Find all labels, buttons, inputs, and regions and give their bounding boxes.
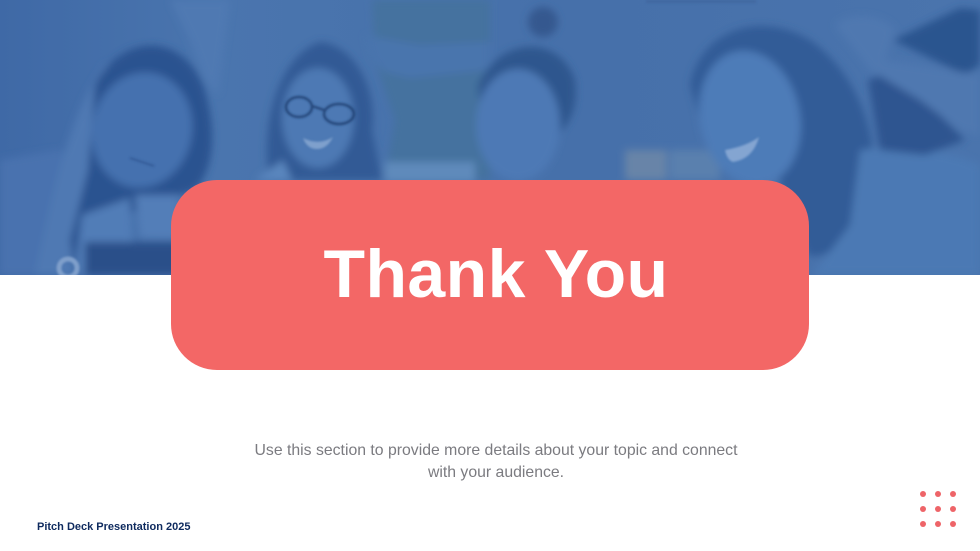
coral title panel	[171, 180, 809, 370]
body text: Use this section to provide more details about your topic and connect	[255, 442, 737, 458]
body text: with your audience.	[428, 464, 564, 481]
decorative dot grid	[920, 491, 956, 527]
title: Thank You: Thank You	[324, 236, 668, 312]
footer label: Pitch Deck Presentation 2025	[37, 520, 190, 532]
team photo with blue overlay	[0, 0, 980, 275]
glasses	[286, 97, 354, 124]
body text	[255, 442, 738, 481]
